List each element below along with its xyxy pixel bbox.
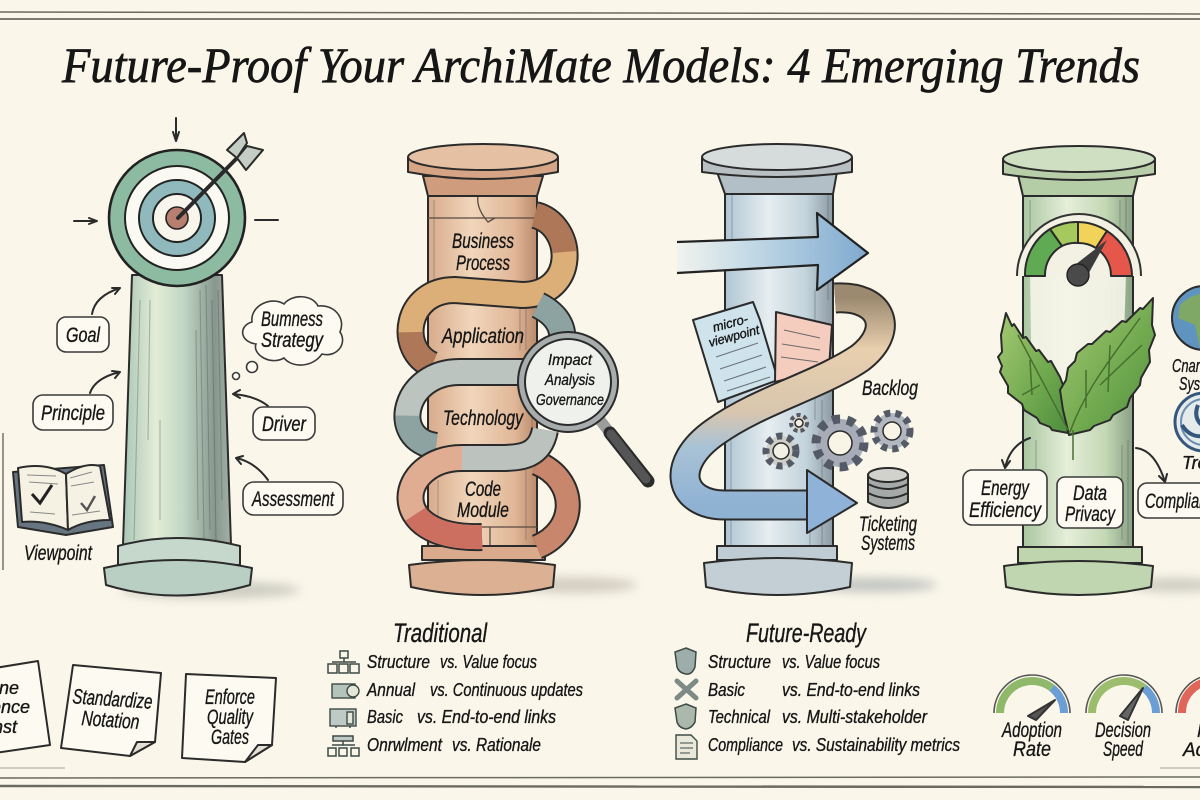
chart: Adoption Rate gauge: Rate xyxy=(1013,738,1051,761)
connector arrows xyxy=(90,288,268,480)
magnifier text: Analysis xyxy=(544,372,595,389)
title: Future-Proof Your ArchiMate Models: 4 Emerging Trends xyxy=(61,37,1140,93)
row: structure: Structure xyxy=(708,652,771,672)
row: compliance: vs. Sustainability metrics xyxy=(792,735,960,755)
row: annual xyxy=(366,680,583,700)
row: annual: vs. Continuous updates xyxy=(430,680,583,700)
document: micro-viewpoint: micro- xyxy=(711,311,750,335)
document: micro-viewpoint: viewpoint xyxy=(707,322,762,350)
row: basic xyxy=(367,707,556,727)
chain: business link xyxy=(411,215,565,365)
chart: Adoption Rate gauge xyxy=(994,675,1070,761)
note: Enforce Quality Gates: Quality xyxy=(207,706,254,729)
label: Energy Efficiency: Energy xyxy=(981,477,1030,500)
icon: gears xyxy=(766,413,910,467)
row: basic: Basic xyxy=(708,680,745,700)
chart: sustainability gauge xyxy=(1017,214,1141,286)
panel: traditional comparison xyxy=(328,618,583,756)
label: Ticketing Systems: Systems xyxy=(861,532,915,555)
arrow: S-curve ribbon xyxy=(685,298,880,533)
label: Driver: Driver xyxy=(262,413,307,436)
magnifier text: Impact xyxy=(548,352,593,369)
icon: devices xyxy=(330,709,356,728)
label: Goal xyxy=(57,317,109,352)
gauge needle xyxy=(1067,240,1107,286)
icon: arrow in target xyxy=(178,133,263,218)
row: technical: vs. Multi-stakeholder xyxy=(782,707,928,727)
cloud: Business Strategy: Strategy xyxy=(261,329,324,352)
note: Standardize Notation xyxy=(61,665,161,756)
label: Viewpoint: Viewpoint xyxy=(24,542,93,565)
icon: clipboard xyxy=(676,735,697,759)
label: Business Process xyxy=(452,230,514,275)
chart: Adoption Rate gauge: Adoption xyxy=(1001,719,1062,742)
cloud: Business Strategy xyxy=(232,297,343,380)
panel: metric gauges xyxy=(994,675,1200,761)
icon: open book viewpoint xyxy=(13,465,113,535)
row: technical xyxy=(708,707,928,727)
chart: Decision Speed gauge: Decision xyxy=(1095,719,1151,742)
target tick arrows xyxy=(74,118,278,224)
pillar shaft xyxy=(725,190,833,548)
heading: Future-Ready: Future-Ready xyxy=(746,618,867,648)
label: Data Privacy: Privacy xyxy=(1065,503,1116,526)
icon: shield xyxy=(675,648,696,674)
icon: stewardship badge xyxy=(1175,393,1200,451)
connector arrows xyxy=(1002,438,1167,482)
icon: magnifier xyxy=(518,332,648,481)
icon: round shield xyxy=(675,704,696,729)
panel: sticky notes xyxy=(0,661,276,762)
icon: two leaves xyxy=(998,298,1155,460)
label: Energy Efficiency xyxy=(963,470,1047,525)
label: Assessment: Assessment xyxy=(251,488,335,511)
label: Business Process: Business xyxy=(452,230,514,253)
row: structure: Structure xyxy=(367,652,430,672)
chain: code link xyxy=(410,430,568,547)
icon: crossed tools xyxy=(677,681,696,698)
white gauge face xyxy=(1030,276,1126,382)
pillar base xyxy=(104,538,252,596)
chart: Decision Speed gauge: Speed xyxy=(1103,738,1144,761)
row: basic: Basic xyxy=(367,707,403,727)
row: structure: vs. Value focus xyxy=(782,652,880,672)
row: basic: vs. End-to-end links xyxy=(417,707,556,727)
row: onrwlment: Onrwlment xyxy=(367,735,443,755)
row: onrwlment xyxy=(367,735,541,755)
label: Energy Efficiency: Efficiency xyxy=(969,499,1042,522)
row: compliance: Compliance xyxy=(708,735,783,755)
label: Goal: Goal xyxy=(66,324,101,347)
label: Code Module: Module xyxy=(457,499,509,522)
pillar capital xyxy=(1003,146,1155,196)
note: Enforce Quality Gates: Gates xyxy=(211,726,249,749)
note: Enforce Quality Gates: Enforce xyxy=(205,686,255,709)
row: compliance xyxy=(708,735,960,755)
label: Technology: Technology xyxy=(443,407,524,430)
label: Application: Application xyxy=(440,325,524,348)
icon: hierarchy xyxy=(328,651,359,673)
heading: Traditional: Traditional xyxy=(393,618,488,648)
row: technical: Technical xyxy=(708,707,771,727)
panel: pillar 1 strategy target xyxy=(13,118,343,599)
pillar shaft xyxy=(428,192,537,548)
row: structure xyxy=(708,652,880,672)
row: onrwlment: vs. Rationale xyxy=(452,735,541,755)
icon: database xyxy=(868,468,908,508)
note: Enforce Quality Gates xyxy=(182,674,276,762)
label: Assessment xyxy=(243,482,343,515)
document: micro-viewpoint xyxy=(693,302,778,402)
chart: third gauge xyxy=(1176,675,1200,761)
magnifier text xyxy=(536,352,604,409)
icon: target xyxy=(109,150,245,286)
panel: future-ready comparison xyxy=(675,618,960,759)
label: Principle xyxy=(33,395,113,430)
icon: envelope magnifier xyxy=(332,684,359,698)
panel: pillar 2 traceability chain xyxy=(407,144,648,595)
magnifier text: Governance xyxy=(536,392,604,409)
row: structure: vs. Value focus xyxy=(440,652,537,672)
label: Data Privacy xyxy=(1057,477,1123,528)
label: Change Systems xyxy=(1172,356,1200,394)
pillar base xyxy=(1004,547,1153,595)
label: Ticketing Systems xyxy=(859,513,917,555)
note: Standardize Notation: Notation xyxy=(81,707,140,734)
label: Compliance xyxy=(1138,483,1200,518)
row: basic xyxy=(708,680,920,700)
label: Code Module: Code xyxy=(465,478,501,501)
pillar shaft xyxy=(123,275,231,545)
chain: technology link xyxy=(407,305,562,446)
cloud: Business Strategy: Bumness xyxy=(261,308,323,331)
pillar capital xyxy=(408,144,558,196)
row: structure xyxy=(367,652,537,672)
row: annual: Annual xyxy=(366,680,416,700)
row: basic: vs. End-to-end links xyxy=(782,680,920,700)
icon: globe xyxy=(1172,286,1200,350)
note: Define Reference xyxy=(0,661,50,753)
chart: Decision Speed gauge xyxy=(1086,675,1162,761)
label: Business Process: Process xyxy=(456,252,510,275)
label: Data Privacy: Data xyxy=(1073,482,1107,505)
label: Backlog: Backlog xyxy=(862,377,918,400)
label: Code Module xyxy=(457,478,509,522)
note: Standardize Notation: Standardize xyxy=(72,685,153,714)
panel: pillar 4 sustainability xyxy=(963,146,1200,595)
panel: pillar 3 continuous flow xyxy=(677,144,937,595)
label: Principle: Principle xyxy=(41,402,105,425)
pillar base xyxy=(409,546,555,595)
label: Driver xyxy=(253,407,315,440)
arrow: top flow xyxy=(677,213,868,290)
pillar base xyxy=(704,546,852,595)
document: red note xyxy=(775,312,832,382)
icon: hierarchy with header xyxy=(328,736,359,756)
label: Ticketing Systems: Ticketing xyxy=(859,513,917,536)
pillar shaft xyxy=(1023,190,1133,548)
pillar capital xyxy=(702,144,852,194)
